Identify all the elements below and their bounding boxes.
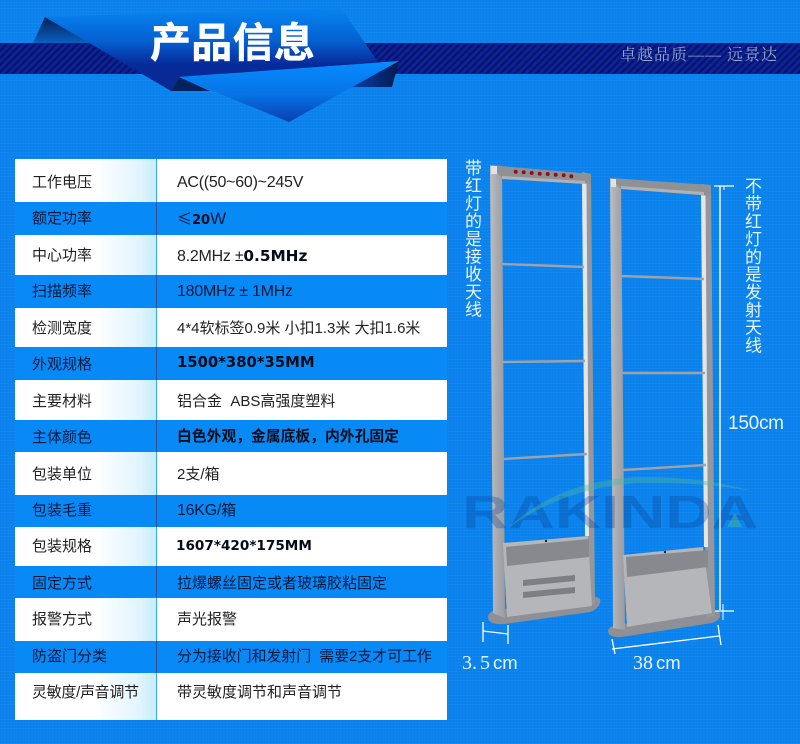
row: 外观规格 — [15, 347, 447, 380]
row: 中心功率: 中心功率 — [32, 247, 92, 264]
label: 38cm: cm — [656, 652, 681, 673]
row: 固定方式: 拉爆螺丝固定或者玻璃胶粘固定 — [177, 575, 387, 592]
row: 中心功率 — [15, 235, 447, 275]
row: 主要材料: 铝合金 ABS高强度塑料 — [177, 393, 335, 410]
lower panel — [503, 536, 592, 617]
row: 主要材料 — [15, 380, 447, 420]
row: 包装规格: 包装规格 — [32, 538, 92, 555]
row: 主要材料: 主要材料 — [32, 393, 92, 410]
main ribbon — [45, 8, 378, 91]
vents — [523, 575, 575, 598]
label: receiving antenna: 带红灯的是接收天线 — [462, 159, 481, 318]
left fold — [33, 17, 90, 43]
row: 中心功率: 8.2MHz ±0.5MHz — [177, 247, 307, 265]
slogan: 卓越品质—— 远景达 — [620, 47, 778, 64]
base — [608, 611, 720, 637]
row: 包装毛重: 16KG/箱 — [177, 502, 236, 519]
striped band — [0, 43, 800, 74]
lower panel — [623, 547, 712, 627]
right column — [701, 184, 715, 618]
row: 额定功率: ≤20W — [177, 208, 226, 229]
red lamps — [514, 170, 573, 178]
row: 扫描频率: 180MHz ± 1MHz — [177, 283, 293, 300]
top bar — [610, 178, 711, 196]
row: 扫描频率 — [15, 275, 447, 308]
row: 包装毛重: 包装毛重 — [32, 502, 92, 519]
row: 额定功率 — [15, 202, 447, 235]
row: 工作电压: AC((50~60)~245V — [177, 174, 303, 191]
right fold — [352, 61, 399, 87]
row: 工作电压: 工作电压 — [32, 174, 92, 191]
base — [488, 597, 600, 624]
right column — [582, 172, 595, 606]
row: 包装毛重 — [15, 495, 447, 527]
row: 包装单位: 2支/箱 — [177, 466, 220, 483]
row: 灵敏度/声音调节 — [15, 673, 447, 720]
row: 检测宽度: 4*4软标签0.9米 小扣1.3米 大扣1.6米 — [177, 320, 420, 337]
row: 固定方式 — [15, 566, 447, 598]
row: 工作电压 — [15, 159, 447, 202]
row: 扫描频率: 扫描频率 — [32, 283, 92, 300]
rails — [621, 276, 706, 470]
row: 包装规格: 1607*420*175MM — [176, 538, 312, 554]
left column — [610, 178, 625, 630]
label: 38cm: 38 — [633, 652, 653, 674]
lower left fold — [171, 77, 210, 91]
dimension: width 38cm — [612, 625, 721, 654]
title: 产品信息 — [150, 20, 315, 66]
dimension: depth 3.5cm — [483, 622, 508, 644]
dimension: height 150cm — [714, 186, 734, 620]
row: 外观规格: 外观规格 — [32, 356, 92, 373]
row: 固定方式: 固定方式 — [32, 575, 92, 592]
row: 包装单位: 包装单位 — [32, 466, 92, 483]
label: 3.5cm: 5 — [480, 652, 490, 674]
row: 灵敏度/声音调节: 带灵敏度调节和声音调节 — [177, 684, 342, 701]
label: 3.5cm: cm — [493, 652, 518, 673]
row: 主体颜色: 主体颜色 — [32, 429, 92, 446]
label: 3.5cm: 3. — [462, 652, 477, 674]
row: 主体颜色: 白色外观，金属底板，内外孔固定 — [177, 429, 399, 445]
panel: specification table — [15, 159, 447, 720]
header banner — [0, 8, 800, 122]
row: 检测宽度: 检测宽度 — [32, 320, 92, 337]
label: 150cm: 150cm — [728, 413, 784, 434]
top bar — [490, 165, 591, 184]
watermark: RAKINDA: RAKINDA — [462, 486, 758, 538]
row: 主体颜色 — [15, 420, 447, 452]
row: 报警方式: 报警方式 — [32, 611, 92, 628]
row: 包装规格 — [15, 527, 447, 566]
label: transmitting antenna: 不带红灯的是发射天线 — [742, 177, 761, 354]
row: 防盗门分类: 防盗门分类 — [32, 648, 107, 665]
row: 灵敏度/声音调节: 灵敏度/声音调节 — [32, 684, 139, 701]
watermark: RAKINDA — [462, 477, 758, 538]
row: 报警方式 — [15, 598, 447, 641]
transmitting gate — [608, 178, 720, 637]
arrow ribbon — [179, 61, 399, 122]
row: 检测宽度 — [15, 308, 447, 347]
row: 防盗门分类 — [15, 641, 447, 673]
row: 额定功率: 额定功率 — [32, 210, 92, 227]
row: 报警方式: 声光报警 — [177, 611, 237, 628]
row: 外观规格: 1500*380*35MM — [177, 354, 315, 371]
left column — [490, 165, 505, 618]
row: 包装单位 — [15, 452, 447, 495]
rails — [502, 264, 587, 459]
receiving gate — [488, 165, 600, 624]
row: 防盗门分类: 分为接收门和发射门 需要2支才可工作 — [177, 648, 432, 665]
